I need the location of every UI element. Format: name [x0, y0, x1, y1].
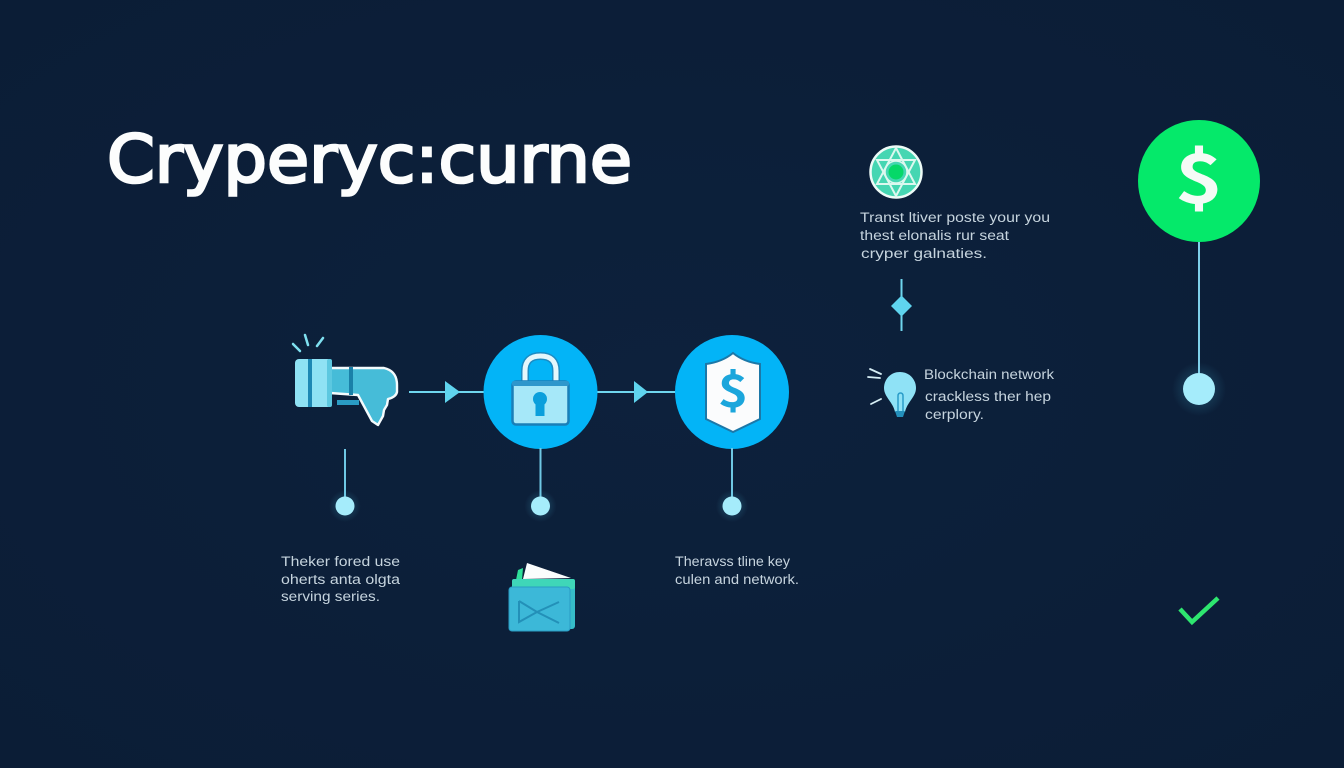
text block: top right caption: thest elonalis rur seat [860, 228, 1009, 243]
connector: hammer node [329, 449, 361, 522]
text block: left caption: oherts anta olgta [281, 572, 401, 587]
icon: shield circle [675, 335, 789, 449]
text block: top right caption: cryper galnaties. [861, 246, 987, 261]
icon: light bulb [868, 369, 916, 417]
text block: left caption: serving series. [281, 589, 380, 604]
text block: blockchain caption: crackless ther hep [925, 389, 1051, 404]
icon: hammer [293, 335, 397, 425]
text block: blockchain caption: cerplory. [925, 407, 984, 422]
connector: lock node [524, 448, 556, 522]
text block: top right caption: Transt ltiver poste your you [860, 210, 1050, 225]
icon: check mark [1180, 598, 1218, 622]
arrow: lock to shield [596, 381, 677, 403]
icon: green dollar coin: $ [1175, 124, 1223, 223]
text block: top right caption [860, 210, 1050, 261]
icon: wallet [509, 563, 575, 631]
icon: shield circle: $ [718, 355, 748, 420]
arrow: hammer to lock [409, 381, 485, 403]
connector: diamond [891, 279, 912, 331]
text block: left caption [281, 554, 401, 604]
text block: shield caption [675, 554, 799, 587]
icon: green dollar coin [1138, 120, 1260, 242]
text block: blockchain caption: Blockchain network [924, 367, 1054, 382]
title: Cryperyc:curne [107, 121, 632, 198]
text block: shield caption: culen and network. [675, 572, 799, 587]
text block: shield caption: Theravss tline key [675, 554, 790, 569]
icon: network globe [870, 146, 922, 198]
text block: left caption: Theker fored use [281, 554, 400, 569]
connector: shield node [716, 448, 748, 522]
text block: blockchain caption [924, 367, 1054, 422]
connector: green coin line [1172, 240, 1226, 416]
icon: padlock circle [484, 335, 598, 449]
